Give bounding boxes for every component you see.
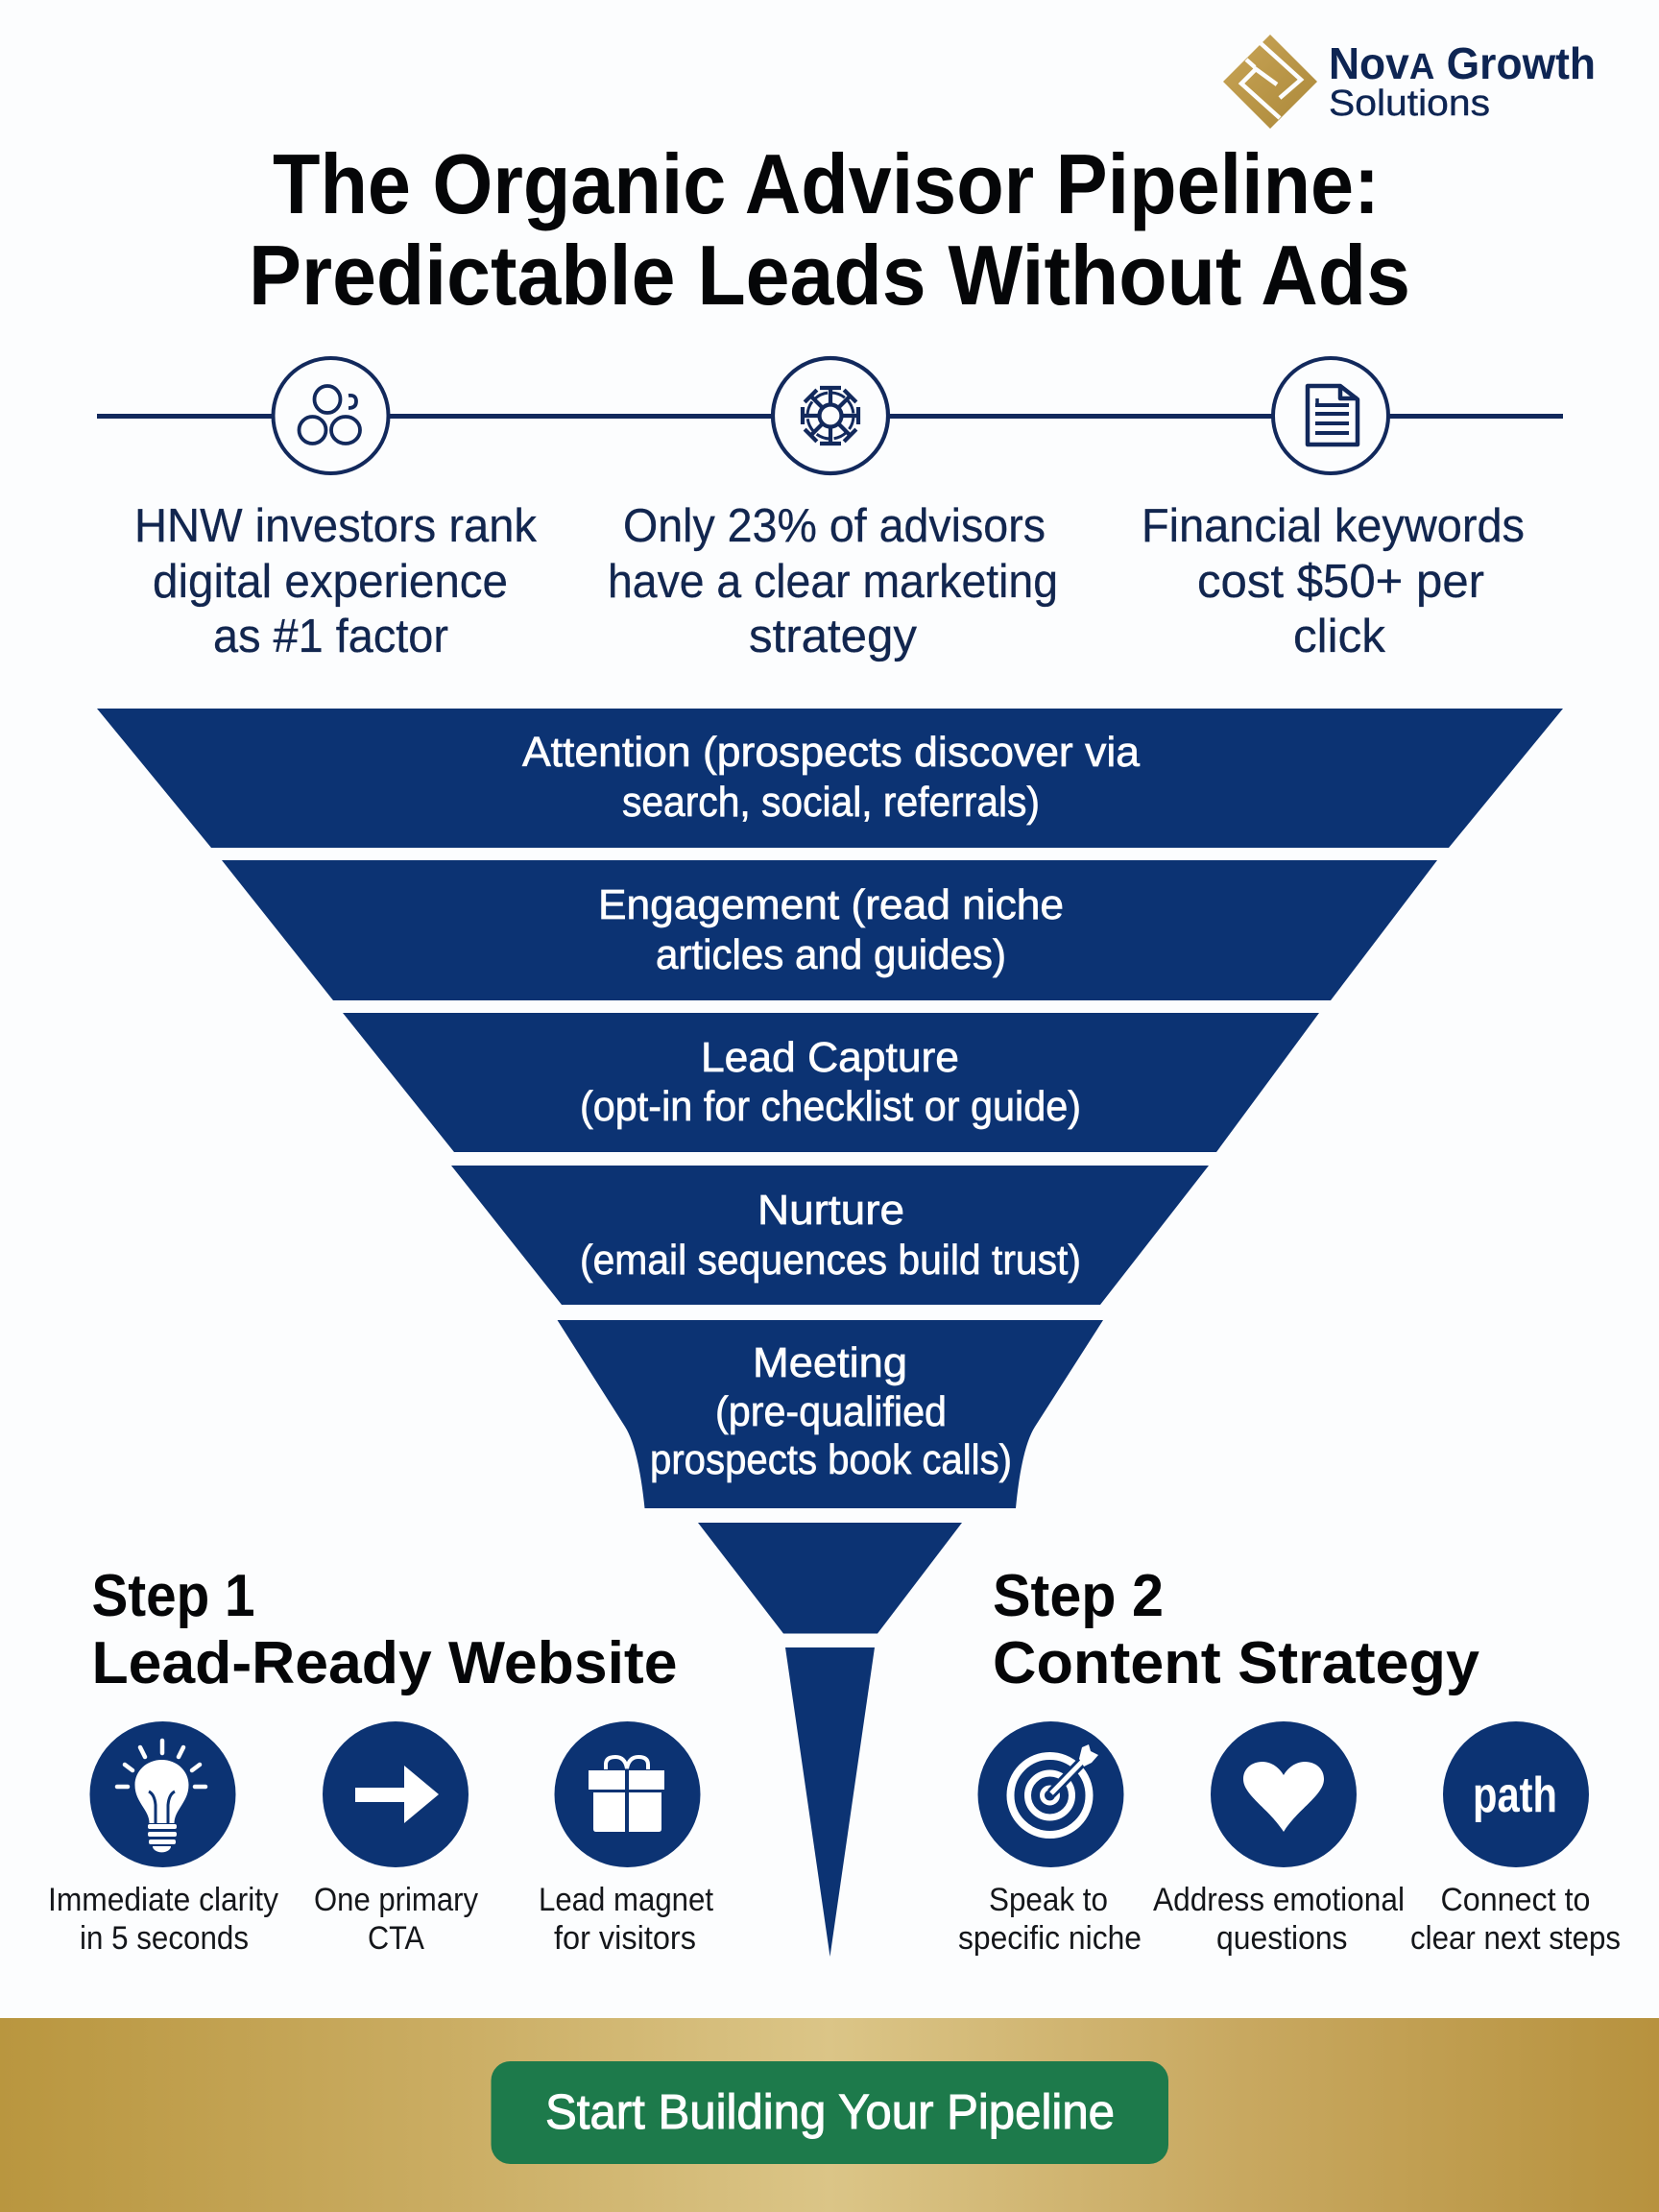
caption: niche: specific niche: [958, 1920, 1142, 1957]
caption: CTA: One primary: [314, 1882, 478, 1918]
logo: Nova Growth Solutions: [1223, 35, 1596, 129]
heading: step 2: [993, 1563, 1480, 1696]
caption: emotional questions: [1153, 1882, 1405, 1957]
funnel band: meeting: Meeting: [753, 1339, 907, 1386]
icon: target with arrow: [977, 1721, 1123, 1867]
icon: document: [1273, 358, 1388, 473]
footer gold band: [0, 2018, 1659, 2212]
caption: CTA: [314, 1882, 478, 1957]
caption: next steps: clear next steps: [1410, 1920, 1621, 1957]
funnel band: attention: Attention (prospects discover via: [522, 729, 1141, 776]
icon: people circles: [273, 358, 388, 473]
stat: keyword cost: Financial keywords: [1142, 500, 1525, 552]
heading: step 1: Lead-Ready Website: [92, 1630, 678, 1696]
icon: snowflake: [773, 358, 888, 473]
funnel narrow segment: [698, 1523, 962, 1634]
heading: step 1: Step 1: [92, 1563, 255, 1629]
icon: light bulb: [90, 1721, 236, 1867]
stat: keyword cost: [1142, 500, 1525, 662]
call to action button: Start Building Your Pipeline: [545, 2084, 1115, 2139]
stat: keyword cost: click: [1293, 611, 1385, 662]
funnel band: attention: [97, 709, 1563, 848]
caption: next steps: Connect to: [1440, 1882, 1590, 1918]
funnel band: lead capture: Lead Capture: [701, 1034, 959, 1081]
stat: marketing strategy: [608, 500, 1058, 662]
heading: step 2: Content Strategy: [993, 1630, 1480, 1696]
funnel band: engagement: articles and guides): [656, 931, 1006, 978]
panel: step 2 content strategy: [958, 1563, 1621, 1957]
caption: emotional questions: Address emotional: [1153, 1882, 1405, 1918]
icon: arrow: [323, 1721, 469, 1867]
panel: step 1 lead-ready website: [48, 1563, 713, 1957]
caption: clarity: Immediate clarity: [48, 1882, 278, 1918]
title: The Organic Advisor Pipeline:: [273, 136, 1380, 231]
stat: digital experience: as #1 factor: [213, 611, 448, 662]
stat: keyword cost: cost $50+ per: [1197, 556, 1484, 608]
icon: gift box: [555, 1721, 701, 1867]
funnel band: nurture: (email sequences build trust): [580, 1237, 1081, 1284]
icon: heart: [1211, 1721, 1357, 1867]
funnel band: meeting: (pre-qualified: [715, 1388, 947, 1435]
logo name: NovA Growth: [1329, 38, 1596, 88]
heading: step 1: [92, 1563, 678, 1696]
caption: lead magnet: for visitors: [554, 1920, 696, 1957]
title: [249, 136, 1410, 323]
caption: clarity: [48, 1882, 278, 1957]
funnel tip: [785, 1647, 875, 1957]
stat: marketing strategy: strategy: [749, 611, 917, 662]
stat: marketing strategy: Only 23% of advisors: [623, 500, 1046, 552]
funnel band: engagement: [222, 860, 1437, 1000]
stat: digital experience: HNW investors rank: [134, 500, 537, 552]
funnel band: lead capture: [343, 1013, 1319, 1152]
funnel band: nurture: [451, 1166, 1209, 1305]
funnel band: attention: search, social, referrals): [622, 779, 1040, 826]
funnel band: meeting: prospects book calls): [650, 1436, 1012, 1483]
stat: marketing strategy: have a clear marketing: [608, 556, 1058, 608]
icon: path label: path: [1473, 1767, 1557, 1823]
funnel band: nurture: Nurture: [757, 1187, 904, 1234]
funnel band: lead capture: (opt-in for checklist or guide): [580, 1083, 1081, 1130]
heading: step 2: Step 2: [993, 1563, 1164, 1629]
caption: CTA: CTA: [368, 1920, 424, 1957]
call to action button: [492, 2061, 1168, 2164]
caption: lead magnet: Lead magnet: [539, 1882, 713, 1918]
title: Predictable Leads Without Ads: [249, 228, 1410, 323]
funnel band: engagement: Engagement (read niche: [598, 881, 1064, 928]
funnel band: meeting: [557, 1320, 1103, 1508]
caption: niche: Speak to: [989, 1882, 1108, 1918]
icon: path label: [1443, 1721, 1589, 1867]
logo subtitle: Solutions: [1329, 84, 1490, 124]
icon: gold diamond logo mark: [1223, 35, 1317, 129]
caption: emotional questions: questions: [1216, 1920, 1348, 1957]
caption: next steps: [1410, 1882, 1621, 1957]
timeline connector with three stat icons: [97, 358, 1563, 473]
funnel: [97, 709, 1563, 1957]
caption: niche: [958, 1882, 1142, 1957]
stat: digital experience: digital experience: [153, 556, 508, 608]
stat: digital experience: [134, 500, 537, 662]
caption: clarity: in 5 seconds: [80, 1920, 249, 1957]
caption: lead magnet: [539, 1882, 713, 1957]
